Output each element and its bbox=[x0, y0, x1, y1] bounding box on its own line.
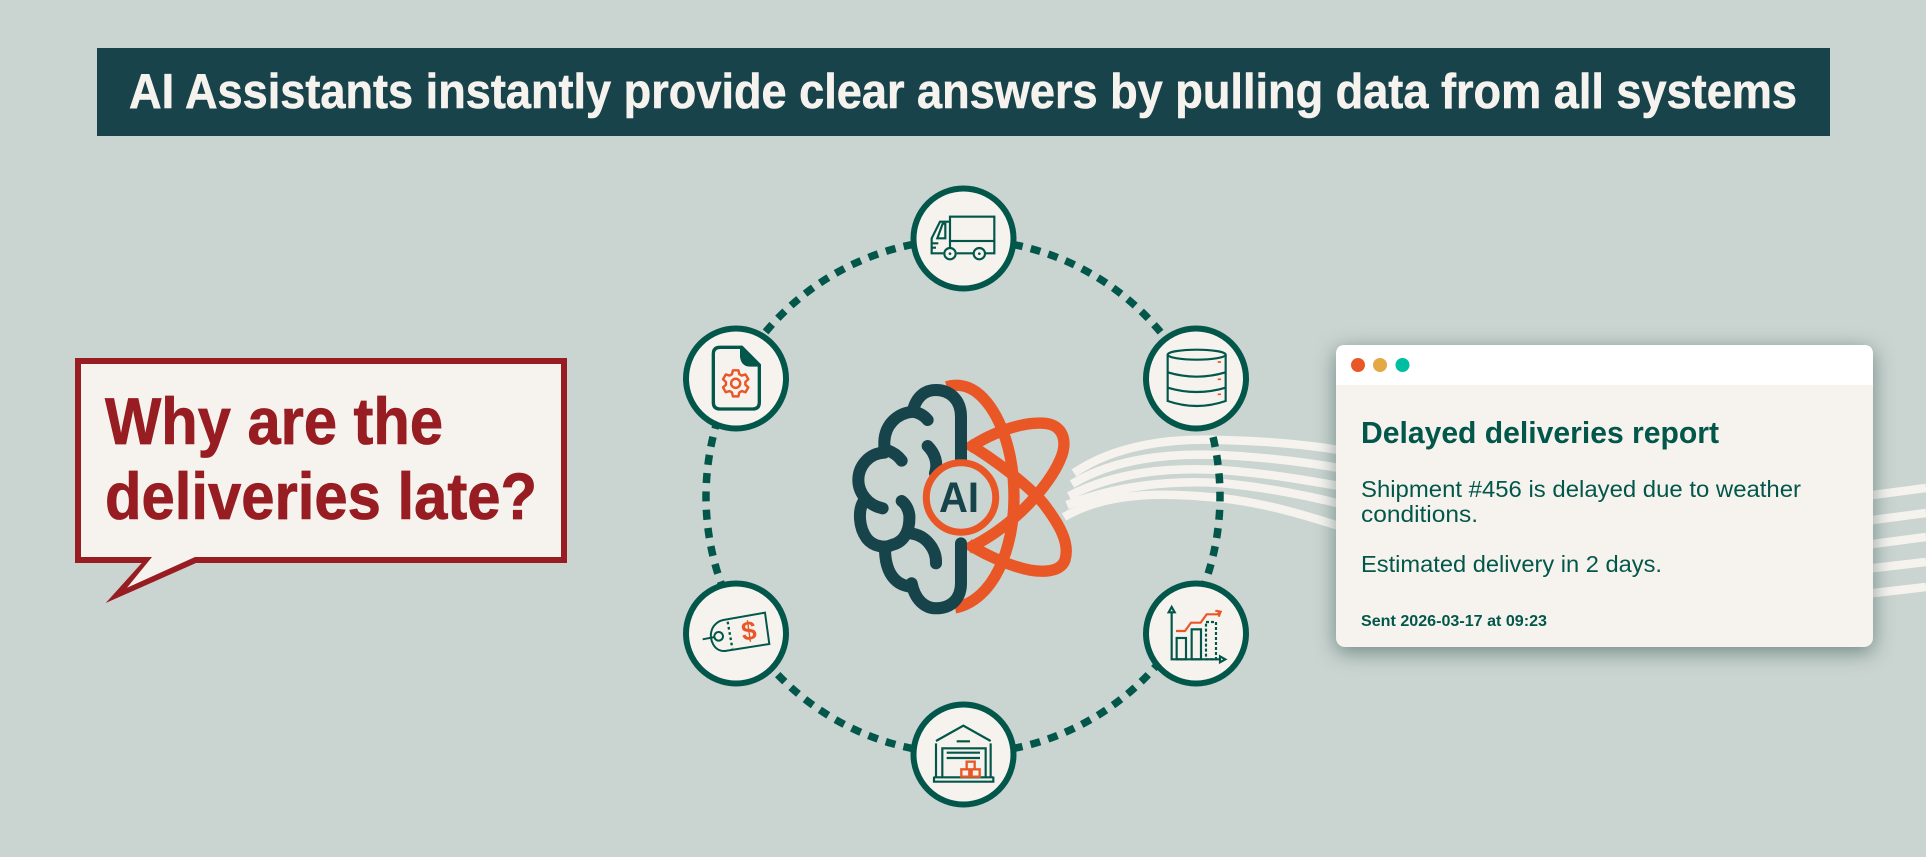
speech bubble: question bbox=[75, 358, 567, 603]
icon: database bbox=[1146, 328, 1246, 428]
window title bar bbox=[1336, 345, 1873, 385]
title banner: AI Assistants instantly provide clear answers by pulling data from all systems bbox=[129, 65, 1797, 119]
speech bubble: question: Why are the bbox=[105, 384, 443, 458]
AI brain and atom icon bbox=[858, 385, 1066, 608]
icon: document with gear bbox=[686, 328, 786, 428]
sent timestamp: Sent 2026-03-17 at 09:23 bbox=[1361, 613, 1547, 630]
report card window bbox=[1336, 345, 1873, 647]
card body text: Shipment #456 is delayed due to weather bbox=[1361, 476, 1801, 502]
card body text: Estimated delivery in 2 days. bbox=[1361, 551, 1662, 577]
data streams flowing from AI to the report card bbox=[1064, 440, 1345, 528]
card heading: Delayed deliveries report bbox=[1361, 415, 1719, 450]
data streams leaving the report card bbox=[1865, 488, 1926, 594]
icon: bar chart with trend bbox=[1146, 584, 1246, 684]
speech bubble: question: deliveries late? bbox=[105, 459, 537, 533]
card body text bbox=[1361, 476, 1801, 577]
icon: price tag: $ bbox=[739, 615, 758, 647]
dotted ring connecting the systems bbox=[706, 240, 1220, 754]
window control dots bbox=[1351, 358, 1410, 372]
icon: price tag bbox=[686, 584, 786, 684]
title banner bbox=[97, 48, 1830, 136]
AI badge bbox=[926, 463, 996, 532]
icon: delivery truck bbox=[914, 188, 1014, 288]
brain halves bbox=[858, 390, 961, 608]
AI brain and atom icon: AI bbox=[939, 474, 979, 522]
card body text: conditions. bbox=[1361, 501, 1478, 527]
icon: warehouse bbox=[914, 704, 1014, 804]
atom orbits bbox=[947, 385, 1066, 608]
